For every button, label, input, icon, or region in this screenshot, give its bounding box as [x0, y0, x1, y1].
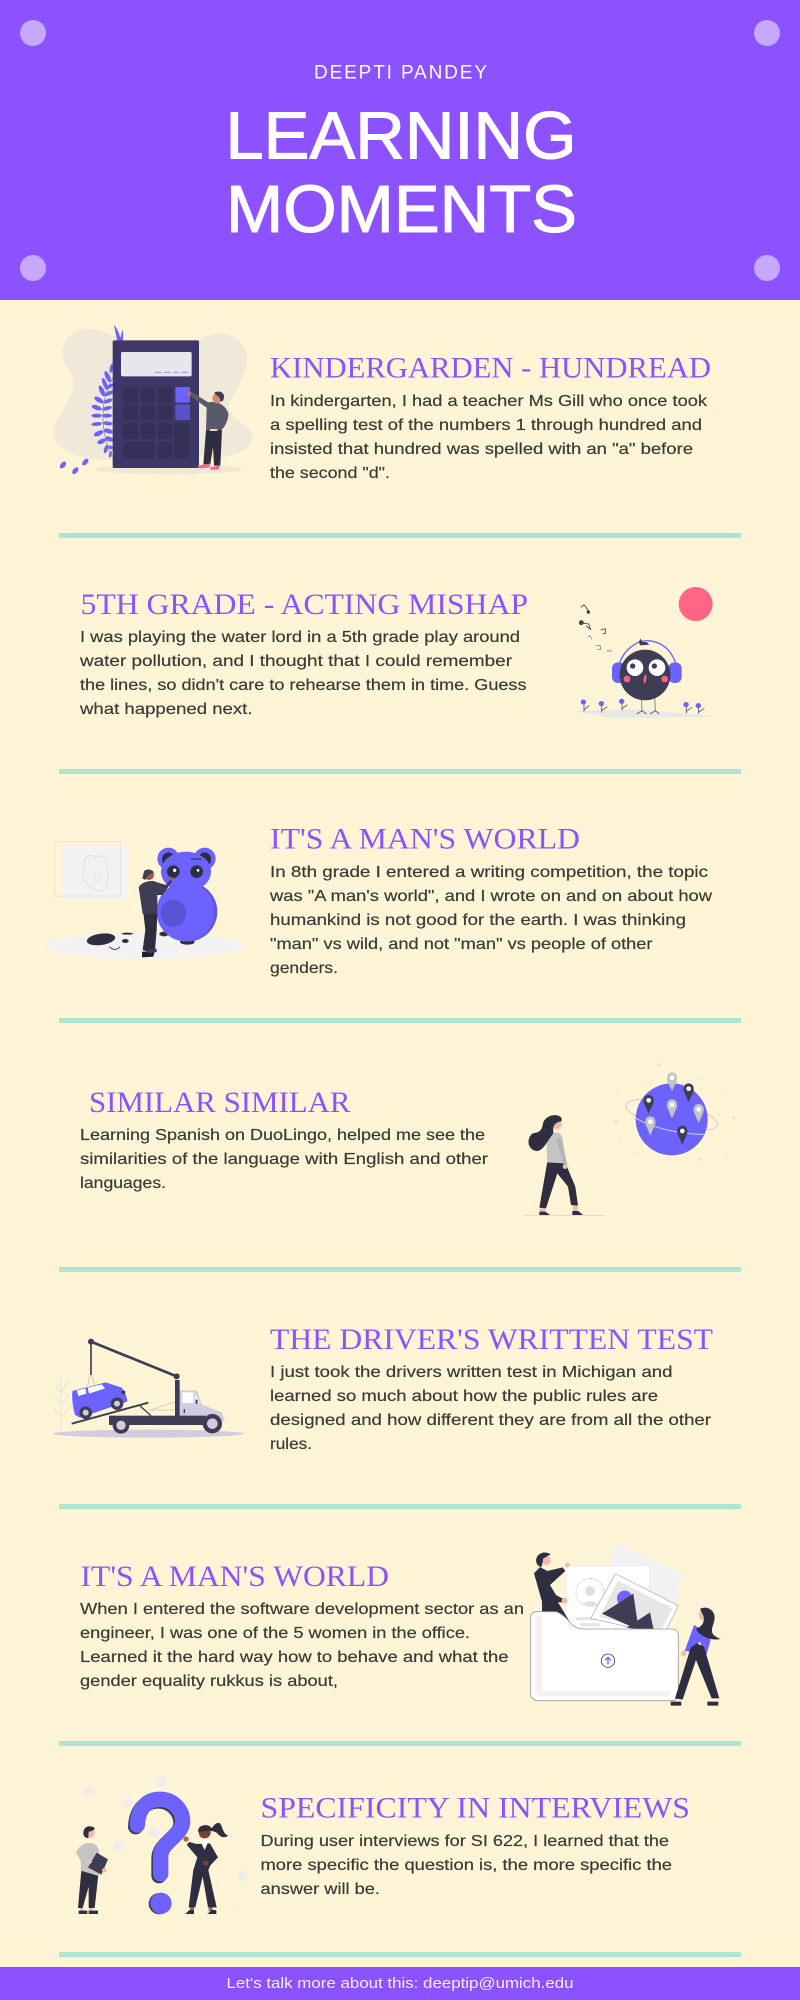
text block: the lines, so didn't care to rehearse them in time. Guess — [80, 677, 526, 694]
panel: driver's written test — [53, 1323, 713, 1453]
text block — [270, 393, 708, 482]
text block: In kindergarten, I had a teacher Ms Gill who once took — [270, 393, 708, 410]
heading: IT'S A MAN'S WORLD — [270, 822, 580, 856]
text block: the second "d". — [270, 465, 390, 482]
panel: man's world 8th grade — [46, 822, 713, 977]
text block — [80, 1127, 489, 1192]
text block: gender equality rukkus is about, — [80, 1673, 338, 1690]
text block: was "A man's world", and I wrote on and on about how — [269, 888, 713, 905]
text block: genders. — [270, 960, 338, 977]
text block: insisted that hundred was spelled with an "a" before — [270, 441, 693, 458]
text block: engineer, I was one of the 5 women in the office. — [80, 1625, 470, 1642]
title — [226, 98, 577, 247]
text block: Learning Spanish on DuoLingo, helped me see the — [80, 1127, 485, 1144]
text block: I just took the drivers written test in Michigan and — [270, 1364, 672, 1381]
text block — [270, 1364, 712, 1453]
icon: woman and globe — [524, 1063, 735, 1215]
text block — [260, 1833, 672, 1898]
text block: rules. — [270, 1436, 312, 1453]
heading: KINDERGARDEN - HUNDREAD — [270, 352, 711, 384]
text block: languages. — [80, 1175, 166, 1192]
heading: 5TH GRADE - ACTING MISHAP — [80, 588, 528, 621]
text block — [79, 629, 526, 718]
icon: tow truck — [53, 1339, 244, 1438]
icon: man and bear — [46, 842, 244, 959]
icon: bird with headphones — [574, 587, 720, 718]
icon: question mark with people — [76, 1776, 248, 1914]
text block: When I entered the software development sector as an — [80, 1601, 524, 1618]
text block: "man" vs wild, and not "man" vs people of other — [270, 936, 653, 953]
title: LEARNING — [226, 98, 576, 174]
text block: Learned it the hard way how to behave and what the — [80, 1649, 509, 1666]
text block: I was playing the water lord in a 5th grade play around — [80, 629, 520, 646]
header banner — [0, 0, 800, 300]
footer: Let's talk more about this: deeptip@umich.edu — [226, 1975, 574, 1992]
text block: During user interviews for SI 622, I learned that the — [260, 1833, 669, 1850]
panel: similar similar — [80, 1063, 735, 1215]
text block: learned so much about how the public rules are — [270, 1388, 658, 1405]
text block: designed and how different they are from all the other — [270, 1412, 712, 1429]
title: MOMENTS — [226, 172, 577, 247]
heading: THE DRIVER'S WRITTEN TEST — [270, 1323, 713, 1356]
panel: specificity in interviews — [76, 1776, 690, 1914]
text block — [269, 864, 713, 977]
corner dots — [20, 20, 780, 281]
heading: SIMILAR SIMILAR — [89, 1086, 350, 1119]
footer — [0, 1967, 800, 2000]
text block — [80, 1601, 524, 1690]
icon: calculator and man — [53, 325, 257, 480]
text block: humankind is not good for the earth. I was thinking — [270, 912, 686, 929]
text block: a spelling test of the numbers 1 through hundred and — [270, 417, 702, 434]
panel: kindergarden — [53, 325, 711, 482]
text block: answer will be. — [260, 1881, 380, 1898]
text block: water pollution, and I thought that I could remember — [79, 653, 513, 670]
panel: acting mishap — [79, 587, 720, 718]
icon: folder with people — [531, 1544, 737, 1706]
text block: In 8th grade I entered a writing competition, the topic — [270, 864, 708, 881]
text block: similarities of the language with English and other — [80, 1151, 489, 1168]
text block: what happened next. — [79, 701, 253, 718]
text block: more specific the question is, the more specific the — [260, 1857, 672, 1874]
heading: SPECIFICITY IN INTERVIEWS — [260, 1792, 690, 1824]
heading: IT'S A MAN'S WORLD — [80, 1560, 389, 1593]
author name: DEEPTI PANDEY — [314, 62, 487, 84]
panel: man's world software — [80, 1544, 737, 1706]
